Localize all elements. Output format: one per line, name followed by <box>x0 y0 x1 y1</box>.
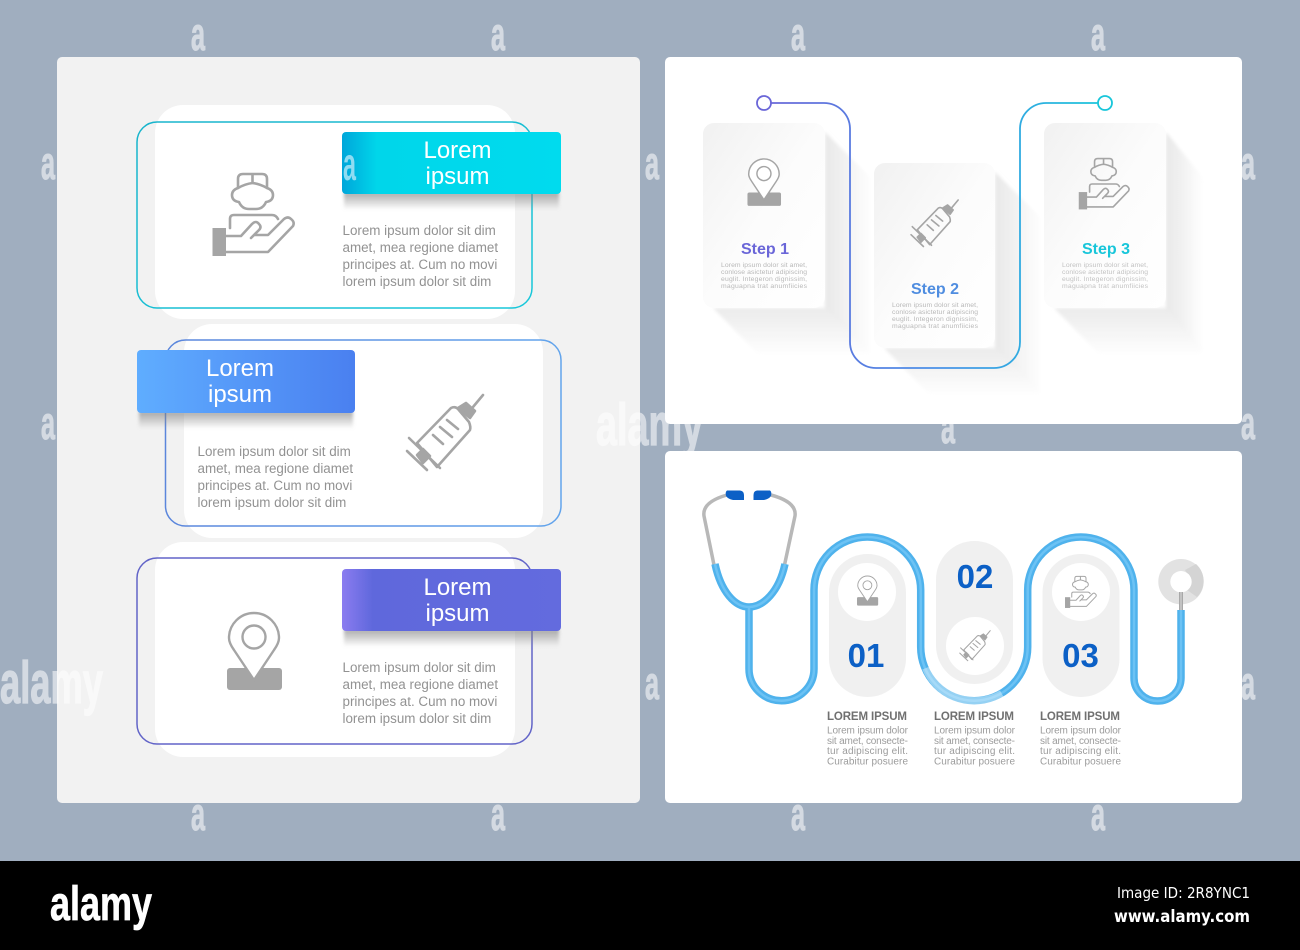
icon: nurse in pill <box>1065 576 1096 608</box>
watermark: left: alamy <box>0 650 103 716</box>
step 3 text: maguapna trat anumfiicies <box>1062 283 1149 290</box>
card 1 text: lorem ipsum dolor sit dim <box>342 274 491 289</box>
pill 02 <box>936 541 1013 684</box>
step 2 text: maguapna trat anumfiicies <box>892 323 979 330</box>
step 2 text <box>892 302 979 330</box>
card 3 text: amet, mea regione diamet <box>342 677 498 692</box>
column 1 text <box>827 711 909 768</box>
step 2 text: Lorem ipsum dolor sit amet, <box>892 302 978 309</box>
panel: left cards <box>57 57 640 803</box>
card 3 heading: Lorem <box>423 574 492 601</box>
watermark marks on background: a <box>41 137 55 189</box>
column 1 text: Lorem ipsum dolor <box>827 726 909 736</box>
step 3 text <box>1062 262 1149 290</box>
stethoscope <box>704 490 1204 701</box>
card 1: nurse care <box>137 105 561 319</box>
step 3 text: Lorem ipsum dolor sit amet, <box>1062 262 1148 269</box>
card 3 heading: ipsum <box>425 600 490 627</box>
icon: syringe <box>407 395 483 470</box>
watermark marks on background: a <box>191 8 205 60</box>
icon: pin small <box>747 159 781 206</box>
card 3 text: principes at. Cum no movi <box>342 694 497 709</box>
panel: stethoscope timeline <box>665 451 1242 803</box>
card 3 text: lorem ipsum dolor sit dim <box>342 711 491 726</box>
step 1 text: conlose asictetur adipiscing <box>721 269 807 276</box>
watermark marks on background: a <box>1091 788 1105 840</box>
step 1 text: maguapna trat anumfiicies <box>721 283 808 290</box>
number 01: 01 <box>848 637 884 674</box>
column 1 text: tur adipiscing elit. <box>827 746 908 757</box>
footer bar <box>0 861 1300 950</box>
column 3 text <box>1040 711 1122 768</box>
column 3 text: sit amet, consecte- <box>1040 736 1121 747</box>
step 3 text: euglit. Integeron dignissim, <box>1062 276 1148 283</box>
card 2 text: amet, mea regione diamet <box>198 461 353 476</box>
card 1 text: Lorem ipsum dolor sit dim <box>342 223 496 238</box>
pill 03 <box>1042 554 1120 697</box>
column 3 text: LOREM IPSUM <box>1040 711 1120 723</box>
card 1 text: amet, mea regione diamet <box>342 240 498 255</box>
step 3 text: conlose asictetur adipiscing <box>1062 269 1148 276</box>
column 3 text: Lorem ipsum dolor <box>1040 726 1122 736</box>
column 2 text <box>934 711 1016 768</box>
step 3 heading: Step 3 <box>1082 241 1130 258</box>
watermark marks on background: a <box>1241 137 1255 189</box>
number 03: 03 <box>1062 637 1099 674</box>
column 2 text: LOREM IPSUM <box>934 711 1014 723</box>
step 3 card <box>1044 123 1166 308</box>
watermark marks on background: a <box>491 788 505 840</box>
step 2 heading: Step 2 <box>911 281 959 298</box>
card 2 heading: ipsum <box>208 381 272 408</box>
column 1 text: LOREM IPSUM <box>827 711 907 723</box>
card 2 text: principes at. Cum no movi <box>198 478 352 493</box>
watermark marks on background: a <box>1241 657 1255 709</box>
column 3 text: Curabitur posuere <box>1040 756 1121 768</box>
watermark marks on background: a <box>41 397 55 449</box>
pill 01 <box>829 554 906 697</box>
connector line <box>757 96 1112 368</box>
column 2 text: Curabitur posuere <box>934 756 1015 768</box>
watermark marks on background: a <box>645 137 659 189</box>
column 1 text: sit amet, consecte- <box>827 736 908 747</box>
footer logo: alamy <box>50 878 152 931</box>
icon: pin in pill <box>857 576 878 606</box>
card 1 text: principes at. Cum no movi <box>342 257 497 272</box>
panel: steps <box>665 57 1242 424</box>
card 2 text: Lorem ipsum dolor sit dim <box>198 444 351 459</box>
card 3: location pin <box>137 542 561 757</box>
step 1 text: Lorem ipsum dolor sit amet, <box>721 262 807 269</box>
number 02: 02 <box>957 558 993 595</box>
card 2: syringe <box>137 324 561 538</box>
icon: syringe in pill <box>960 631 990 661</box>
watermark marks on background: a <box>1241 397 1255 449</box>
watermark marks on background: a <box>645 657 659 709</box>
step 2 card <box>874 163 995 348</box>
step 2 text: euglit. Integeron dignissim, <box>892 316 978 323</box>
watermark marks on background: a <box>791 8 805 60</box>
card 2 text: lorem ipsum dolor sit dim <box>198 495 346 510</box>
footer url: www.alamy.com <box>1114 907 1250 927</box>
column 1 text: Curabitur posuere <box>827 756 908 768</box>
footer image id: Image ID: 2R8YNC1 <box>1117 884 1250 902</box>
step 1 text <box>721 262 808 290</box>
icon: location pin <box>227 613 282 690</box>
card 2 heading: Lorem <box>206 355 274 382</box>
step 1 heading: Step 1 <box>741 241 789 258</box>
icon: nurse hand <box>212 174 294 256</box>
column 3 text: tur adipiscing elit. <box>1040 746 1121 757</box>
step 2 text: conlose asictetur adipiscing <box>892 309 978 316</box>
step 1 text: euglit. Integeron dignissim, <box>721 276 807 283</box>
step 1 card <box>703 123 825 308</box>
watermark marks on background: a <box>941 401 955 453</box>
column 2 text: sit amet, consecte- <box>934 736 1015 747</box>
watermark: center: alamy <box>596 392 703 458</box>
watermark marks on background: a <box>1091 8 1105 60</box>
column 2 text: Lorem ipsum dolor <box>934 726 1016 736</box>
card 1 heading: ipsum <box>425 163 490 190</box>
icon: syringe small <box>911 200 958 246</box>
watermark marks on background: a <box>791 788 805 840</box>
card 1: nurse care: a <box>343 138 356 190</box>
card shadows <box>713 132 1204 396</box>
watermark marks on background: a <box>491 8 505 60</box>
watermark marks on background: a <box>191 788 205 840</box>
column 2 text: tur adipiscing elit. <box>934 746 1015 757</box>
icon: nurse small <box>1079 159 1129 209</box>
card 1 heading: Lorem <box>423 137 492 164</box>
card 3 text: Lorem ipsum dolor sit dim <box>342 660 496 675</box>
